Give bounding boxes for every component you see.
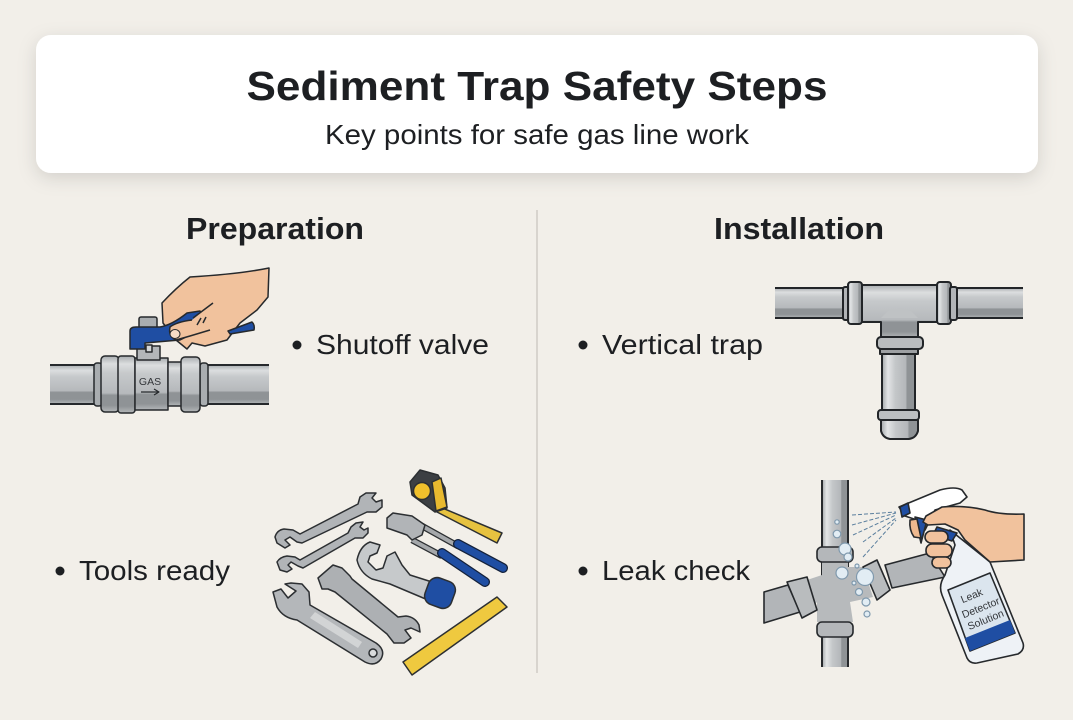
sprayer head	[899, 488, 967, 530]
tape measure	[410, 470, 502, 543]
title: Sediment Trap Safety Steps	[246, 63, 828, 109]
header card	[36, 35, 1038, 173]
bullet: tools ready: Tools ready	[79, 555, 230, 586]
blue lever	[130, 311, 254, 349]
thumb	[170, 303, 240, 340]
large open-end wrench	[273, 583, 383, 664]
tongue pliers	[387, 513, 503, 582]
hand back	[162, 268, 269, 349]
bubbles	[833, 520, 874, 617]
icon: vertical sediment trap	[775, 282, 1023, 439]
spray bottle	[941, 530, 1023, 663]
icon: leak check with spray bottle	[764, 480, 1024, 667]
icon: leak check with spray bottle: Leak	[959, 586, 985, 606]
bullet: leak check: Leak check	[602, 555, 751, 586]
heading: preparation: Preparation	[186, 211, 364, 246]
spray mist	[852, 512, 896, 557]
bullet: shutoff valve: Shutoff valve	[316, 329, 489, 360]
folded measuring tape	[403, 597, 507, 675]
icon: assorted tools	[273, 470, 507, 675]
pipe wrench with blue grip	[357, 542, 458, 611]
hand	[910, 519, 921, 538]
icon: gas shutoff valve with hand	[50, 268, 269, 413]
heading: installation: Installation	[714, 211, 884, 246]
adjustable wrench	[318, 565, 420, 643]
wrench 2	[277, 522, 368, 572]
icon: gas shutoff valve with hand: GAS	[139, 376, 161, 388]
icon: leak check with spray bottle: Detector	[960, 595, 1002, 621]
icon: leak check with spray bottle: Solution	[966, 607, 1006, 633]
bullet: vertical trap: Vertical trap	[602, 329, 763, 360]
wrench 1	[275, 493, 382, 548]
subtitle: Key points for safe gas line work	[325, 119, 750, 150]
